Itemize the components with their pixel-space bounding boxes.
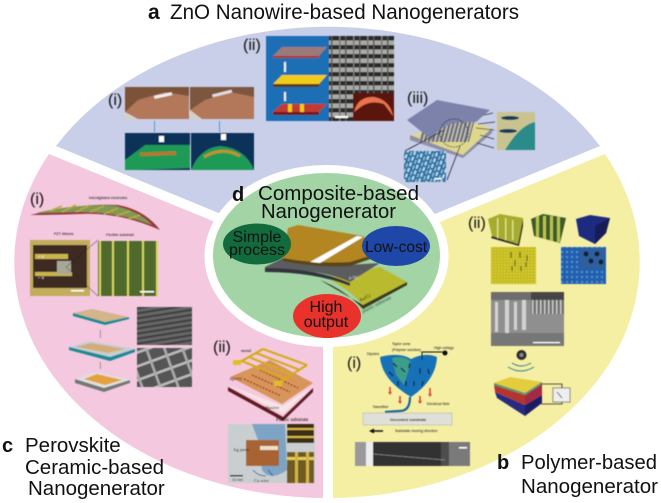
heading d: d — [232, 184, 244, 206]
panel: a(iii) textile nanogenerator: (iii) — [407, 90, 428, 107]
panel: b(i) electrospinning diagram: Grounded substrate — [390, 418, 426, 422]
panel: d composite-based nanogenerator — [213, 173, 440, 338]
composite device illustration: plastic substrate — [362, 295, 393, 315]
panel: b(i) electrospinning diagram: High voltage — [434, 346, 454, 350]
green ellipse — [213, 173, 440, 338]
heading d — [232, 183, 419, 223]
panel: a(ii) nanowire array fabrication: (ii) — [243, 37, 261, 54]
panel: c(i) PZT ribbons: Interdigitated electrodes — [89, 196, 128, 200]
panel: b(i) electrospinning diagram: Dipoles — [367, 352, 379, 356]
title a: a — [148, 1, 160, 24]
panel: c(ii) metal epoxy device — [213, 339, 315, 483]
panel: b(i) electrospinning diagram: Nanofiber — [373, 405, 389, 409]
title b: Polymer-based — [521, 452, 657, 474]
heading d: Nanogenerator — [261, 201, 396, 223]
title b: Nanogenerator — [521, 476, 658, 498]
title b — [497, 452, 658, 498]
panel: a(i) hand sensors: (i) — [108, 92, 122, 109]
panel: c(ii) metal epoxy device: Plastic substrate — [276, 418, 309, 423]
panel: a(i) hand sensors — [108, 87, 254, 170]
panel: a(ii) nanowire array fabrication — [243, 36, 394, 121]
panel: c(i) PZT ribbons: Flexible substrate — [106, 233, 134, 237]
panel: c(i) PZT ribbons — [30, 191, 160, 296]
panel: c(ii) metal epoxy device: 10 mm — [232, 478, 243, 482]
panel: c(i) transfer steps and SEM — [69, 307, 192, 392]
title c: c — [2, 435, 13, 457]
title c: Perovskite — [25, 434, 121, 457]
panel: b(ii) nanostructured polymer cubes: (ii) — [468, 215, 486, 232]
panel: c(i) PZT ribbons: (i) — [30, 191, 44, 208]
panel: a(iii) textile nanogenerator — [404, 90, 535, 182]
panel: b(i) electrospinning diagram: (Polymer solution) — [392, 348, 421, 352]
title b: b — [497, 452, 509, 474]
panel: c(i) PZT ribbons: PZT ribbons — [54, 232, 74, 236]
panel: c(ii) metal epoxy device: (ii) — [213, 339, 231, 356]
composite device illustration: Au/Cr — [359, 294, 372, 304]
title c — [2, 434, 165, 500]
title a: ZnO Nanowire-based Nanogenerators — [170, 1, 519, 24]
sector b: polymer — [333, 154, 640, 498]
panel: c(ii) metal epoxy device: Cu wire — [254, 478, 269, 483]
panel: c(ii) metal epoxy device: epoxy — [230, 377, 243, 382]
title c: Ceramic-based — [25, 456, 164, 479]
composite device illustration — [265, 225, 407, 315]
panel: b(i) electrospinning diagram: Substrate moving direction — [395, 429, 438, 433]
badge: simple process: process — [229, 242, 285, 259]
title c: Nanogenerator — [28, 477, 165, 500]
badge: low-cost: Low-cost — [365, 239, 428, 256]
panel: c(ii) metal epoxy device: adhesive — [263, 405, 279, 410]
badge: high output: output — [304, 314, 349, 331]
centre ring — [204, 165, 448, 347]
panel: c(i) PZT ribbons: + V — [38, 254, 44, 259]
panel: b(i) electrospinning diagram — [347, 342, 470, 466]
heading d: Composite-based — [258, 183, 419, 205]
panel: c(ii) metal epoxy device: metal — [241, 348, 252, 353]
badge: low-cost — [362, 226, 430, 266]
composite device illustration: p-NC — [349, 275, 359, 280]
panel: c(ii) metal epoxy device: Ag paste — [233, 447, 249, 452]
panel: c(i) PZT ribbons: − V — [38, 275, 44, 280]
panel: b(i) electrospinning diagram: (i) — [347, 355, 361, 372]
badge: simple process — [223, 224, 291, 264]
panel: b(ii) nanostructured polymer cubes — [468, 214, 610, 416]
sector a: ZnO nanowire — [56, 27, 600, 258]
sector c: perovskite ceramic — [14, 154, 323, 498]
panel: b(i) electrospinning diagram: Taylor cone — [392, 342, 410, 346]
badge: high output: High — [310, 299, 342, 316]
panel: b(i) electrospinning diagram: Electrical field — [427, 402, 449, 406]
badge: simple process: Simple — [233, 229, 282, 246]
badge: high output — [293, 294, 361, 338]
